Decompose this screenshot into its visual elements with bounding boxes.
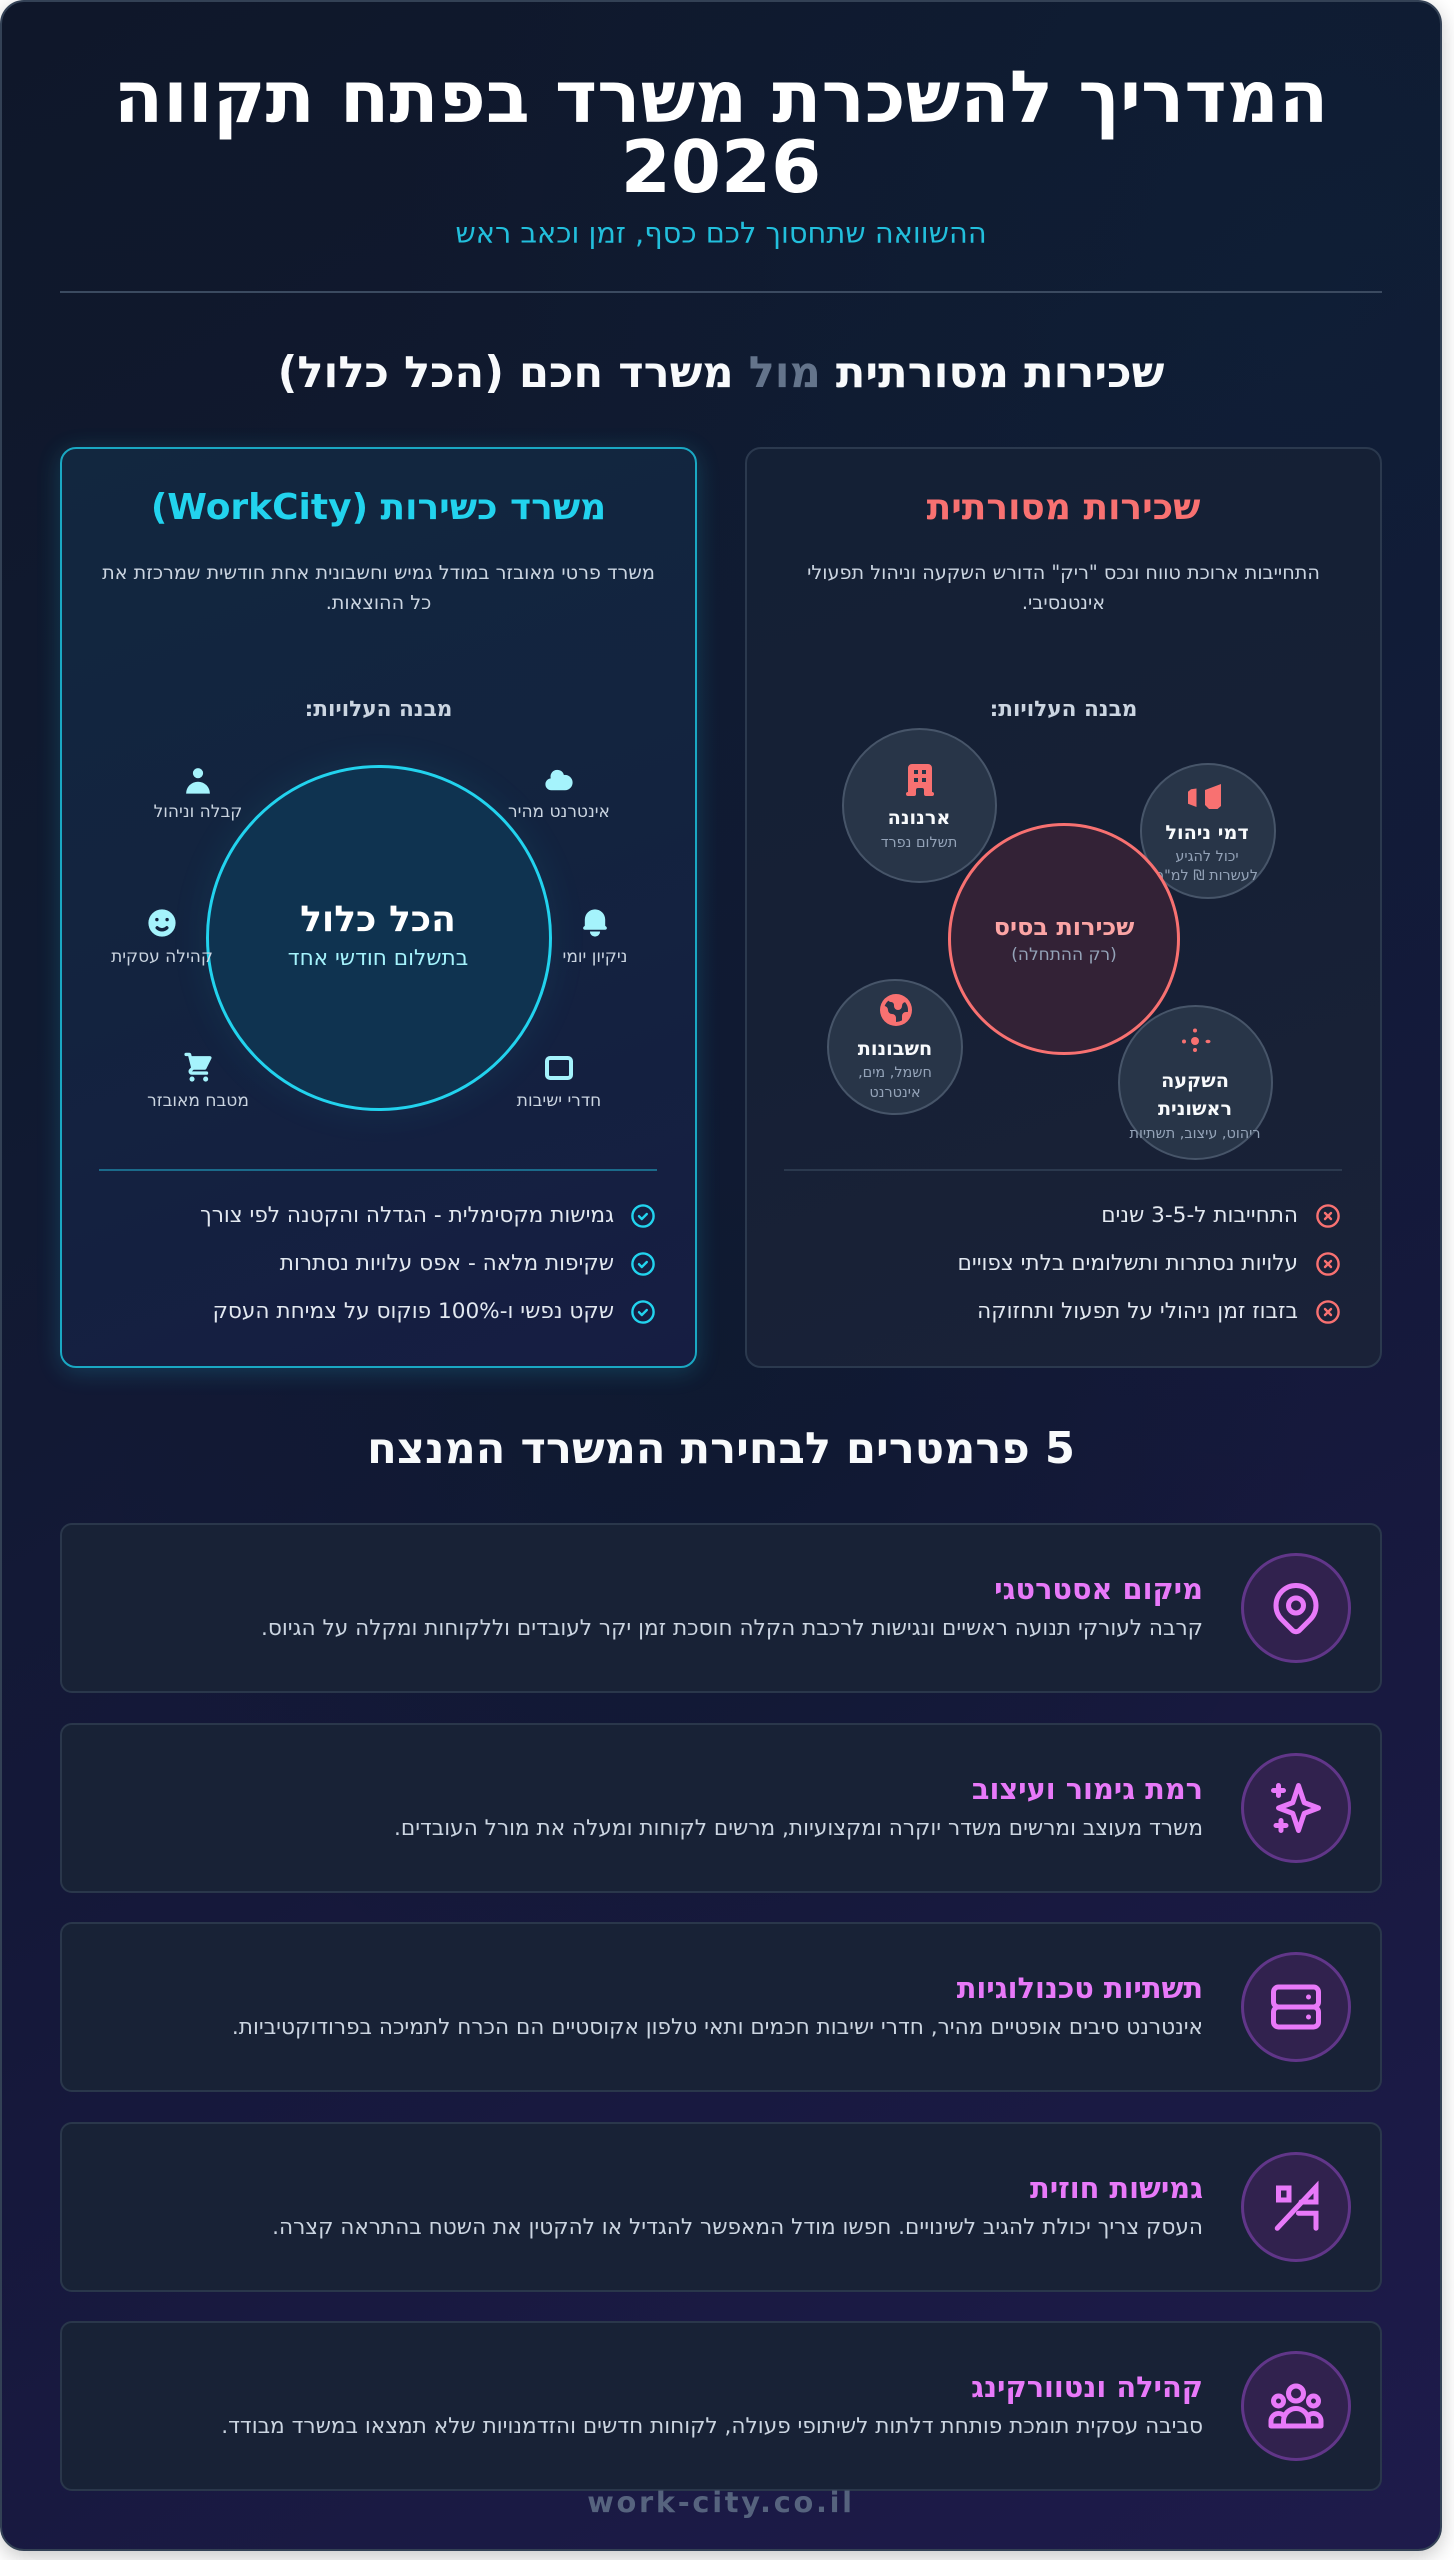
label: business community: קהילה עסקית: [111, 947, 213, 967]
bubble: initial investment: [1118, 1005, 1273, 1160]
left panel heading: משרד כשירות (WorkCity): [151, 487, 606, 528]
bubble title: ארנונה: [888, 806, 950, 829]
bubble note: ריהוט, עיצוב, תשתיות: [1129, 1126, 1260, 1142]
icon: meeting room: [545, 1056, 573, 1080]
icon: cloud: [545, 770, 573, 790]
right cost structure label: מבנה העלויות:: [990, 697, 1137, 722]
bubble note: חשמל, מים,: [858, 1065, 932, 1081]
card title: רמת גימור ועיצוב: [972, 1772, 1203, 1806]
left panel description: משרד פרטי מאובזר במודל גמיש וחשבונית אחת חודשית שמרכזת את כל ההוצאות.: [102, 561, 655, 614]
right panel heading: שכירות מסורתית: [927, 487, 1200, 528]
central base rent circle: [948, 823, 1180, 1055]
card text: סביבה עסקית תומכת פותחת דלתות לשיתופי פעולה, לקוחות חדשים והזדמנויות שלא תמצאו במשרד מבודד.: [221, 2414, 1203, 2439]
drawback 2: עלויות נסתרות ותשלומים בלתי צפויים: [958, 1251, 1298, 1276]
right panel drawbacks list: [958, 1203, 1340, 1324]
label: fast internet: אינטרנט מהיר: [508, 802, 610, 822]
icon: server: [1241, 1952, 1351, 2062]
central all-inclusive circle: [206, 765, 552, 1111]
bubble note second line: אינטרנט: [869, 1085, 921, 1101]
icon: megaphone: [1188, 784, 1221, 809]
central circle subtitle: בתשלום חודשי אחד: [288, 946, 468, 971]
base rent note: (רק ההתחלה): [1011, 945, 1117, 965]
base rent title: שכירות בסיס: [994, 913, 1134, 941]
bubble title: השקעה: [1161, 1069, 1229, 1092]
title: המדריך להשכרת משרד בפתח תקווה 2026: [114, 55, 1328, 209]
label: meeting rooms: חדרי ישיבות: [517, 1091, 601, 1111]
left panel benefits list: [200, 1203, 655, 1324]
bubble: property tax: [842, 728, 997, 883]
panel: traditional rental: [745, 447, 1382, 1368]
bubble title: דמי ניהול: [1165, 821, 1249, 844]
card: community and networking: [60, 2321, 1382, 2491]
panel: WorkCity serviced office: [60, 447, 697, 1368]
bubble note: תשלום נפרד: [881, 835, 957, 851]
label: cleaning: ניקיון יומי: [563, 947, 627, 967]
card: finish and design: [60, 1722, 1382, 1892]
benefit 2: שקיפות מלאה - אפס עלויות נסתרות: [280, 1251, 614, 1276]
footer website address: work-city.co.il: [587, 2485, 855, 2519]
label: reception: קבלה וניהול: [154, 802, 242, 822]
parameters section heading: 5 פרמטרים לבחירת המשרד המנצח: [367, 1424, 1075, 1474]
subtitle: ההשוואה שתחסוך לכם כסף, זמן וכאב ראש: [455, 216, 987, 250]
card text: אינטרנט סיבים אופטיים מהיר, חדרי ישיבות חכמים ותאי טלפון אקוסטיים הם הכרח לתמיכה בפרודוקטיביות.: [232, 2015, 1203, 2040]
central circle title: הכל כלול: [300, 899, 456, 940]
bubble title second line: ראשונית: [1158, 1097, 1232, 1120]
bubble note: יכול להגיע: [1175, 849, 1239, 865]
card: contract flexibility: [60, 2122, 1382, 2292]
card title: קהילה ונטוורקינג: [971, 2370, 1203, 2404]
right panel description: התחייבות ארוכת טווח ונכס "ריק" הדורש השקעה וניהול תפעולי אינטנסיבי.: [807, 561, 1320, 614]
icon: sparkles: [1241, 1752, 1351, 1862]
label: kitchen: מטבח מאובזר: [147, 1091, 249, 1111]
icon: person: [186, 768, 210, 794]
icon: smile: [148, 909, 176, 937]
traditional rental cost bubbles diagram: [827, 728, 1276, 1160]
card: strategic location: [60, 1523, 1382, 1693]
icon: building: [906, 764, 934, 796]
icon: light burst: [1182, 1028, 1210, 1052]
card: technology infrastructure: [60, 1922, 1382, 2092]
bubble: management fees: [1140, 763, 1276, 899]
card text: העסק צריך יכולת להגיב לשינויים. חפשו מודל המאפשר להגדיל או להקטין את השטח בהתראה קצרה.: [272, 2214, 1203, 2240]
icon: flexibility: [1241, 2152, 1351, 2262]
icon: people group: [1241, 2351, 1351, 2461]
card title: מיקום אסטרטגי: [994, 1572, 1203, 1606]
bubble title: חשבונות: [858, 1037, 932, 1060]
card text: משרד מעוצב ומרשים משדר יוקרה ומקצועיות, מרשים לקוחות ומעלה את מורל העובדים.: [394, 1816, 1203, 1840]
all-inclusive cost diagram: [111, 765, 627, 1111]
card text: קרבה לעורקי תנועה ראשיים ונגישות לרכבת הקלה חוסכת זמן יקר לעובדים וללקוחות ומקלה על הגיוס.: [261, 1616, 1203, 1641]
card title: תשתיות טכנולוגיות: [957, 1971, 1203, 2005]
icon: cart: [184, 1052, 212, 1082]
card title: גמישות חוזית: [1030, 2170, 1203, 2204]
drawback 3: בזבוז זמן ניהולי על תפעול ותחזוקה: [977, 1299, 1298, 1324]
icon: globe: [880, 994, 912, 1026]
benefit 1: גמישות מקסימלית - הגדלה והקטנה לפי צורך: [200, 1203, 614, 1228]
bubble note second line: לעשרות ₪ למ"ר: [1156, 868, 1258, 884]
benefit 3: שקט נפשי ו-100% פוקוס על צמיחת העסק: [213, 1299, 614, 1324]
left cost structure label: מבנה העלויות:: [305, 697, 452, 722]
bubble: utility bills: [827, 979, 963, 1115]
comparison section heading: שכירות מסורתית מול משרד חכם (הכל כלול): [278, 348, 1164, 398]
icon: map pin: [1241, 1553, 1351, 1663]
icon: bell: [583, 909, 607, 937]
drawback 1: התחייבות ל-3-5 שנים: [1101, 1203, 1298, 1228]
